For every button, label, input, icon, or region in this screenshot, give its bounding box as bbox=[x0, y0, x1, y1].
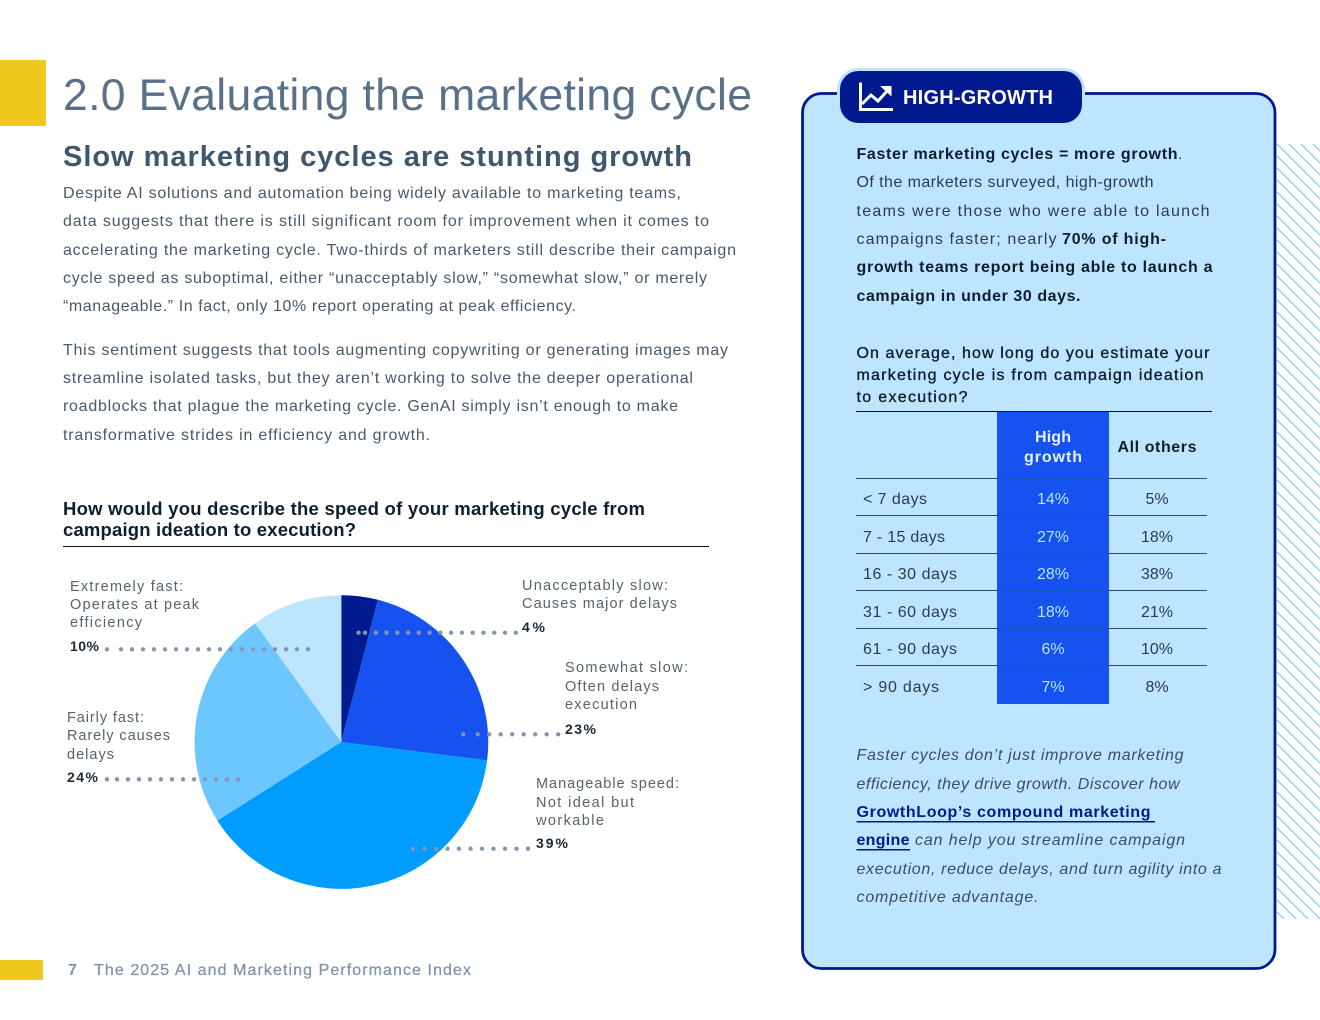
text block: intro paragraph two: This sentiment suggests that tools augmenting copywriting or generating images may bbox=[63, 342, 728, 359]
chart question heading bbox=[63, 498, 709, 547]
callout: manageable speed: Not ideal but bbox=[536, 795, 634, 811]
hatch pattern behind panel bbox=[1277, 144, 1320, 919]
row: over 90 days bbox=[863, 679, 1169, 696]
callout: manageable speed: 39% bbox=[536, 835, 569, 851]
text block: faster cycles: campaign in under 30 days. bbox=[856, 288, 1080, 305]
callout: manageable speed: Manageable speed: bbox=[536, 776, 679, 792]
callout: extremely fast: Extremely fast: bbox=[70, 579, 183, 595]
closing call to action: can help you streamline campaign bbox=[915, 832, 1185, 849]
row: 31 to 60 days: 21% bbox=[1141, 604, 1173, 621]
pie chart bbox=[195, 595, 488, 889]
text block: faster cycles: Faster marketing cycles = more growth bbox=[856, 146, 1178, 163]
badge: high-growth bbox=[838, 70, 1084, 124]
table: marketing cycle duration: All others bbox=[1118, 439, 1197, 456]
text block: intro paragraph one: cycle speed as suboptimal, either “unacceptably slow,” “somewhat slow,” or merely bbox=[63, 270, 707, 287]
subheading: Slow marketing cycles are stunting growth bbox=[63, 141, 692, 173]
row: 31 to 60 days bbox=[863, 604, 1173, 621]
closing call to action: efficiency, they drive growth. Discover how bbox=[856, 776, 1181, 793]
chart question heading: campaign ideation to execution? bbox=[63, 519, 356, 540]
row: under 7 days: 14% bbox=[1037, 491, 1069, 508]
page number: 7 bbox=[68, 962, 77, 979]
text block: intro paragraph one: Despite AI solutions and automation being widely available to marketing teams, bbox=[63, 185, 681, 202]
slice: fairly fast 24% bbox=[195, 623, 341, 821]
slice: manageable speed 39% bbox=[217, 742, 487, 889]
row: under 7 days bbox=[863, 491, 1169, 508]
callout: extremely fast bbox=[70, 579, 309, 654]
row: 7 to 15 days: 18% bbox=[1141, 529, 1173, 546]
row: 61 to 90 days: 6% bbox=[1041, 641, 1065, 658]
panel: high-growth sidebar bbox=[802, 94, 1275, 968]
closing call to action: GrowthLoop’s compound marketing bbox=[856, 804, 1150, 821]
callout: somewhat slow: 23% bbox=[565, 721, 597, 737]
callout: fairly fast: Fairly fast: bbox=[67, 710, 144, 726]
callout: extremely fast: Operates at peak bbox=[70, 597, 200, 613]
icon: growth chart bbox=[860, 82, 893, 110]
table question: to execution? bbox=[856, 389, 968, 406]
publication name: The 2025 AI and Marketing Performance Index bbox=[94, 962, 471, 979]
footer bbox=[0, 960, 471, 980]
callout: fairly fast: Rarely causes bbox=[67, 728, 170, 744]
row: 16 to 30 days: 28% bbox=[1037, 566, 1069, 583]
text block: faster cycles: teams were those who were able to launch bbox=[856, 203, 1210, 220]
callout: fairly fast: 24% bbox=[67, 769, 99, 785]
row: 31 to 60 days: 31 - 60 days bbox=[863, 604, 957, 621]
callout: somewhat slow: Often delays bbox=[565, 679, 659, 695]
slice: extremely fast 10% bbox=[255, 595, 341, 742]
callout: extremely fast: 10% bbox=[70, 638, 100, 654]
title: 2.0 Evaluating the marketing cycle bbox=[63, 71, 752, 120]
text block: intro paragraph one: data suggests that there is still significant room for improvement when it comes to bbox=[63, 213, 709, 230]
column headers: High bbox=[1035, 429, 1071, 446]
table question bbox=[856, 345, 1210, 406]
row: over 90 days: > 90 days bbox=[863, 679, 939, 696]
chart question heading: How would you describe the speed of your marketing cycle from bbox=[63, 498, 645, 519]
callout: somewhat slow: Somewhat slow: bbox=[565, 660, 688, 676]
text block: intro paragraph two: roadblocks that plague the marketing cycle. GenAI simply isn’t enough to make bbox=[63, 398, 678, 415]
row: 16 to 30 days bbox=[863, 566, 1173, 583]
yellow title accent block bbox=[0, 60, 46, 126]
closing call to action bbox=[856, 747, 1222, 906]
table: marketing cycle duration bbox=[856, 411, 1212, 704]
slice: somewhat slow 23% bbox=[341, 600, 488, 760]
callout: unacceptably slow: 4% bbox=[522, 619, 546, 635]
text block: faster cycles: . bbox=[1178, 146, 1182, 163]
closing call to action: competitive advantage. bbox=[856, 889, 1038, 906]
table question: marketing cycle is from campaign ideation bbox=[856, 367, 1204, 384]
row: 61 to 90 days bbox=[863, 641, 1173, 658]
badge label: HIGH-GROWTH bbox=[903, 87, 1053, 109]
slice: unacceptably slow 4% bbox=[341, 595, 378, 742]
row: 61 to 90 days: 61 - 90 days bbox=[863, 641, 957, 658]
table question: On average, how long do you estimate your bbox=[856, 345, 1210, 362]
row: 7 to 15 days bbox=[863, 529, 1173, 546]
table: marketing cycle duration: growth bbox=[1024, 449, 1082, 466]
closing call to action: execution, reduce delays, and turn agility into a bbox=[856, 861, 1222, 878]
text block: intro paragraph two bbox=[63, 342, 728, 444]
callout: somewhat slow bbox=[463, 660, 688, 737]
callout: fairly fast bbox=[67, 710, 238, 785]
text block: intro paragraph one: accelerating the marketing cycle. Two-thirds of marketers still describe their campaign bbox=[63, 242, 736, 259]
text block: intro paragraph one bbox=[63, 185, 736, 315]
text block: faster cycles: Of the marketers surveyed, high-growth bbox=[856, 174, 1154, 191]
callout: fairly fast: delays bbox=[67, 747, 114, 763]
row: under 7 days: 5% bbox=[1145, 491, 1169, 508]
text block: faster cycles: growth teams report being able to launch a bbox=[856, 259, 1213, 276]
text block: intro paragraph two: streamline isolated tasks, but they aren’t working to solve the deeper operational bbox=[63, 370, 693, 387]
row: 16 to 30 days: 16 - 30 days bbox=[863, 566, 957, 583]
text block: intro paragraph one: “manageable.” In fact, only 10% report operating at peak efficiency. bbox=[63, 298, 576, 315]
callout: manageable speed bbox=[413, 776, 679, 851]
row: 7 to 15 days: 7 - 15 days bbox=[863, 529, 945, 546]
callout: unacceptably slow: Unacceptably slow: bbox=[522, 578, 668, 594]
row: under 7 days: < 7 days bbox=[863, 491, 927, 508]
callout: somewhat slow: execution bbox=[565, 697, 637, 713]
callout: manageable speed: workable bbox=[535, 813, 604, 829]
row: 61 to 90 days: 10% bbox=[1141, 641, 1173, 658]
row: over 90 days: 7% bbox=[1041, 679, 1065, 696]
text block: faster cycles bbox=[856, 146, 1213, 305]
closing call to action: engine bbox=[856, 832, 910, 849]
closing call to action: Faster cycles don’t just improve marketing bbox=[856, 747, 1184, 764]
callout: unacceptably slow: Causes major delays bbox=[522, 596, 677, 612]
yellow footer tab bbox=[0, 960, 43, 980]
text block: intro paragraph two: transformative strides in efficiency and growth. bbox=[63, 427, 430, 444]
text block: faster cycles: campaigns faster; nearly bbox=[856, 231, 1056, 248]
callout: extremely fast: efficiency bbox=[70, 615, 143, 631]
row: 31 to 60 days: 18% bbox=[1037, 604, 1069, 621]
row: 16 to 30 days: 38% bbox=[1141, 566, 1173, 583]
row: over 90 days: 8% bbox=[1145, 679, 1169, 696]
row: 7 to 15 days: 27% bbox=[1037, 529, 1069, 546]
text block: faster cycles: 70% of high- bbox=[1062, 231, 1166, 248]
callout: unacceptably slow bbox=[358, 578, 677, 635]
high growth column bbox=[997, 412, 1109, 704]
